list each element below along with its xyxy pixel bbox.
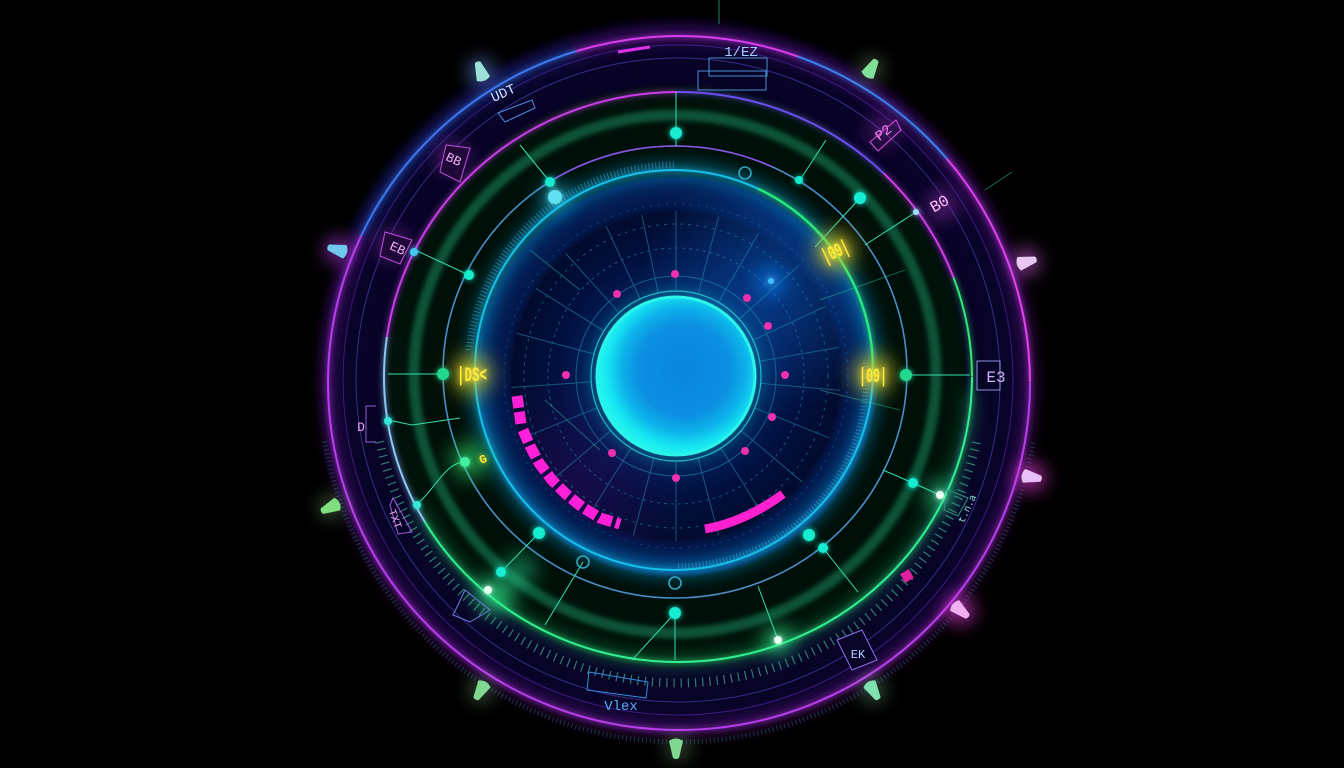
label: BB	[440, 145, 470, 182]
outer ring: blue top right	[328, 36, 1030, 730]
leader lines	[388, 0, 1012, 660]
label: EK	[837, 630, 877, 670]
tick rings	[320, 24, 1038, 742]
ring 2: pale left	[384, 92, 972, 662]
label: E3	[977, 361, 1006, 390]
outer bullet markers	[318, 56, 1043, 759]
bullet glows	[322, 60, 1043, 757]
bullet: right upper	[1015, 252, 1038, 271]
ring 2: bright green lower	[384, 92, 972, 662]
green hot-spot glows	[379, 116, 956, 654]
label: lower left: G	[477, 452, 490, 468]
ring 2: blue top	[384, 92, 972, 662]
label: TXT: TXT	[385, 508, 403, 531]
outer ring halo	[328, 36, 1030, 730]
label: E3: E3	[986, 369, 1006, 387]
label: B0: B0	[927, 192, 953, 217]
label: 1/EZ	[698, 45, 767, 90]
label: 1/EZ: 1/EZ	[724, 45, 758, 61]
core rim	[597, 297, 755, 455]
disc background bands	[314, 14, 1038, 738]
magenta solid arc	[705, 494, 783, 529]
label: upper right: |09|	[819, 237, 854, 270]
magenta segmented arc	[517, 396, 620, 524]
yellow labels	[457, 237, 887, 468]
label: D	[357, 406, 376, 442]
label: EB	[380, 232, 412, 264]
bullet: top left	[471, 59, 491, 83]
outer labels	[357, 45, 1006, 715]
label: EB: EB	[387, 239, 408, 259]
ring 2: green right	[384, 92, 972, 662]
label: right: |09|	[859, 366, 887, 389]
outer ring: blue upper left	[328, 36, 1030, 730]
ring 2: magenta upper left	[384, 92, 972, 662]
outer ring: magenta lower half	[328, 36, 1030, 730]
bullet: bottom	[669, 738, 683, 759]
label: arrow tag	[453, 590, 490, 622]
label: P2	[870, 120, 901, 151]
label: BB: BB	[443, 150, 464, 170]
secondary neon ring	[384, 92, 972, 662]
bullet: bottom right	[862, 678, 885, 703]
inner polar grid	[504, 204, 848, 548]
nodes: magenta	[562, 270, 914, 583]
cyan inner ring	[475, 170, 873, 570]
top magenta accent	[618, 47, 650, 52]
label: UDT: UDT	[489, 82, 519, 107]
core glow	[590, 290, 762, 462]
wide green band	[414, 115, 936, 633]
bullet: top right	[860, 56, 883, 81]
label: TXT	[385, 498, 412, 534]
label: D: D	[357, 420, 365, 435]
label: Vlex	[587, 672, 648, 715]
bullet: bottom left	[469, 678, 492, 703]
label: UDT	[489, 82, 535, 122]
green section of cyan ring	[475, 170, 873, 570]
label: Vlex: Vlex	[604, 699, 638, 715]
central core	[590, 290, 762, 462]
nodes: green	[437, 368, 912, 381]
bullet: lower right	[948, 599, 973, 622]
bullet: left lower	[318, 497, 343, 518]
outer ring: magenta right	[328, 36, 1030, 730]
label: EK: EK	[851, 648, 866, 662]
nodes: teal	[460, 127, 918, 619]
core disc	[598, 298, 754, 454]
label: t.n.a: t.n.a	[957, 493, 980, 525]
bullet: right lower	[1020, 468, 1043, 486]
bullet: left upper	[326, 240, 349, 259]
outer ring: pink top	[328, 36, 1030, 730]
label: P2: P2	[873, 122, 896, 145]
ring nodes	[577, 167, 751, 589]
nodes: white hot	[384, 209, 944, 644]
ring 2: magenta upper right	[384, 92, 972, 662]
label: t.n.a	[944, 490, 980, 525]
label: left: |DS<	[457, 365, 487, 388]
outer neon ring	[328, 36, 1030, 730]
core outer ring	[591, 291, 761, 461]
thin blue-violet ring	[443, 146, 907, 598]
violet arc top	[443, 146, 907, 598]
